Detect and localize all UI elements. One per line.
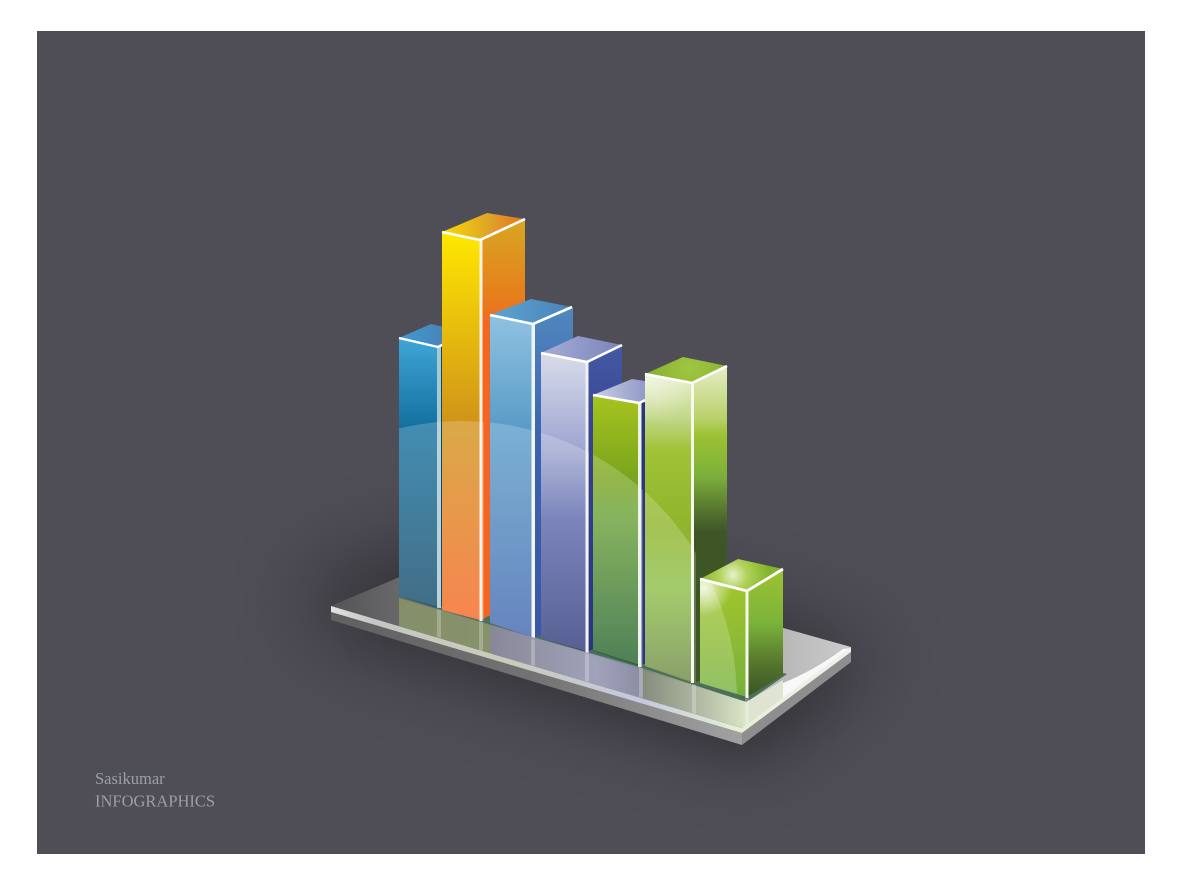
author name: Sasikumar [95,769,165,788]
bar base shadow [396,580,787,702]
credit text [95,769,215,810]
bar: short green [700,559,783,698]
glow on light green bar [645,376,686,416]
reflected bar edges [437,609,749,729]
bar: orange [442,213,525,621]
platform highlight [783,648,851,702]
platform top surface [331,543,851,728]
glass platform [331,543,851,745]
glass reflection overlay on bars [399,421,737,694]
bar: light green [644,357,728,684]
bar: green [593,379,678,667]
platform right face [742,652,851,745]
platform front face [331,612,742,745]
bar: blue [399,324,470,608]
bar: light blue [490,299,573,639]
platform shadow [310,530,880,755]
bar: purple [541,336,622,653]
label: INFOGRAPHICS [95,792,215,810]
platform light lip [331,606,851,733]
reflections on platform [399,598,783,729]
glow on short bar [700,580,730,614]
